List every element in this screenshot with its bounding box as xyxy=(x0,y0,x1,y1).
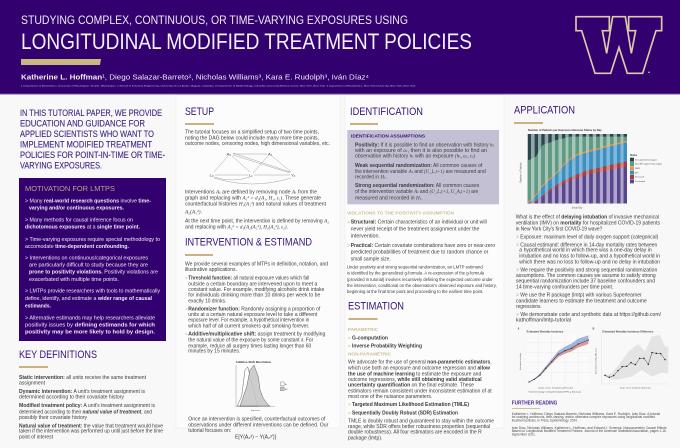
additive shift density chart: Additive Shift Illustration xyxy=(236,360,272,364)
stacked bar and flow chart: NIMV xyxy=(635,168,641,170)
affiliations: 1 Department of Biostatistics, University of Washington, Seattle, Washington. 2 School of Industrial Engineering, University of Los Andes, Bogotá, Colombia. 3 Department of Epidemiology, Columbia University Medical Center, New York, New York. 4 Department of Biostatistics, New York University, New York, New York. xyxy=(21,84,417,88)
motivation bullets xyxy=(25,198,160,335)
intervention types list: > xyxy=(185,275,188,280)
panel: key definitions xyxy=(19,349,163,440)
intervention types list: constant value. For example, modifying alcoholic drink intake xyxy=(188,287,324,293)
positivity violations xyxy=(347,210,495,262)
application question and bullets: > Causal estimand: difference in 14-day mortality rates between xyxy=(516,242,657,248)
icon: university W logo xyxy=(576,17,662,73)
intervention types list: example, reduce all surgery times lasting longer than 60 xyxy=(188,343,311,349)
positivity violations: intervention. xyxy=(351,233,380,239)
positivity violations: small sample size. xyxy=(351,256,391,262)
chart A: estimated mortality incidence: Treatment strategy: ● Delayed Intubation (MTP) ▲ Status quo xyxy=(528,391,582,394)
definitions list: possibly their covariate history xyxy=(19,415,87,421)
identification assumptions box: recorded in Hₜ. xyxy=(355,175,387,181)
stacked bar and flow chart: No supplemental oxygen xyxy=(635,158,657,161)
further reading: Based on Longitudinal Modified Treatment Policies. Journal of the American Statistical Association, pages 1-16, xyxy=(512,429,667,433)
non-parametric estimators: package (lmtp). xyxy=(348,435,382,441)
chart A: estimated mortality incidence: Days since hospital admission xyxy=(538,386,573,389)
chart B: estimated mortality incidence difference: Days since hospital admission xyxy=(620,386,651,389)
identification assumptions box: Weak sequential randomization: All common causes of xyxy=(355,163,483,169)
intervention types list: exactly 10 drinks. xyxy=(188,298,226,304)
chart B: estimated mortality incidence difference xyxy=(593,329,668,389)
intervention types list xyxy=(185,275,325,355)
parametric estimators: Inverse Probability Weighting xyxy=(352,343,422,349)
additive shift density chart: Exposure xyxy=(251,409,261,412)
non-parametric estimators: most one of the nuisance parameters. xyxy=(348,394,432,400)
panel: application xyxy=(512,104,668,437)
intervention types list: outside a certain boundary are intervened upon to meet a xyxy=(188,281,317,287)
application question and bullets: > We use the R package (lmtp) with various Superlearner xyxy=(516,293,642,299)
identification assumptions box: the intervention variable Aₜ and (U_L,t+1) are measured and xyxy=(355,168,486,175)
parametric estimators: > xyxy=(348,335,351,340)
intervention types list: exposure level. For example, a hypothetical intervention in xyxy=(188,318,309,324)
motivation bullets: exacerbated with multiple time points. xyxy=(29,277,119,283)
setup intervention text xyxy=(184,189,329,230)
intervention intro: We provide several examples of MTPs in definition, notation, and xyxy=(185,261,328,267)
DAG diagram: L₁ xyxy=(249,172,253,178)
positivity violations: > xyxy=(347,220,350,225)
DAG diagram: A₀ xyxy=(226,152,231,156)
intervention types list: which half of all current smokers quit smoking forever. xyxy=(188,324,309,330)
identification assumptions box xyxy=(347,130,499,204)
key definitions heading: KEY DEFINITIONS xyxy=(19,349,97,361)
gold title bar xyxy=(21,59,101,65)
application question and bullets: a hypothetical world in which there was a one-day delay in xyxy=(519,248,652,254)
identification assumptions box: with an exposure of aₜ, then it is also possible to find an xyxy=(355,148,487,154)
intervention types list: Randomizer function: Randomly assigning a proportion of xyxy=(188,306,321,312)
definitions list: determined according to their natural value of treatment, and xyxy=(19,409,152,415)
parametric estimators xyxy=(348,327,422,349)
intervention heading: INTERVENTION & ESTIMAND xyxy=(185,237,312,249)
chart A: estimated mortality incidence xyxy=(518,328,590,394)
application question and bullets: ventilation (IMV) on mortality for hospitalized COVID-19 patients xyxy=(516,220,660,226)
motivation bullets: dichotomous exposures at a single time point. xyxy=(25,225,141,231)
setup intervention text: counterfactual histories H₁(A₁ᵈ) and natural values of treatment xyxy=(185,201,327,208)
definitions list: taken if the intervention was performed up until just before the time xyxy=(19,429,163,435)
setup intervention text: A₂(A₁ᵈ). xyxy=(184,208,202,215)
positivity violations: never yield receipt of the treatment assignment under the xyxy=(351,226,479,232)
non-parametric estimators: Sequentially Doubly Robust (SDR) Estimation xyxy=(352,410,458,416)
intro statement: POLICIES FOR POINT-IN-TIME OR TIME- xyxy=(20,150,165,160)
non-parametric estimators: the use of machine learning to estimate the exposure and xyxy=(348,371,481,377)
estimand text xyxy=(188,417,329,434)
positivity violations: > xyxy=(347,243,350,248)
stacked bar and flow chart: IMV xyxy=(635,172,639,174)
intervention intro xyxy=(185,261,328,273)
application question and bullets: in New York City's first COVID-19 wave? xyxy=(516,226,602,232)
motivation bullets: positivity may be more likely to hold by design. xyxy=(25,329,156,335)
application question and bullets: intubation and no loss to follow-up, and a hypothetical world in xyxy=(519,253,660,259)
g-formula note xyxy=(347,265,497,294)
g-formula note: beginning at the final time point and proceeding to the earliest time point. xyxy=(347,289,483,294)
additive shift density chart: Aᵈ xyxy=(285,388,287,391)
estimation heading: ESTIMATION xyxy=(348,300,404,312)
parametric estimators: G-computation xyxy=(352,335,388,341)
additive shift density chart: A xyxy=(285,383,287,386)
stacked bar and flow chart: Deceased xyxy=(635,177,644,179)
further reading: FURTHER READING xyxy=(512,401,557,407)
setup intro text: noting the DAG below could include many more time points, xyxy=(185,135,319,141)
setup intro text: The tutorial focuses on a simplified setup of two time points, xyxy=(185,129,319,135)
DAG diagram: Y₂ xyxy=(291,172,296,178)
DAG diagram: L₀ xyxy=(210,172,214,178)
motivation bullets: > Many methods for causal inference focus on xyxy=(25,217,133,223)
setup intervention text: At the next time point, the intervention is defined by removing A₂ xyxy=(185,218,329,224)
application question and bullets xyxy=(516,215,662,324)
further reading: for studying continuous, time-varying, and/or otherwise complex exposures using longitudinal modified xyxy=(512,415,655,419)
intervention types list: Threshold function: all natural exposure values which fall xyxy=(188,275,309,281)
further reading: Iván Díaz, Nicholas Williams, Katherine L. Hoffman, and Edward J. Schenck. Nonparametric Causal Effects xyxy=(512,426,667,430)
g-formula note: (provided in tutorial) involves recursively defining the expected outcome under xyxy=(347,277,493,282)
application question and bullets: 14 time-varying confounders per time point. xyxy=(516,284,613,290)
parametric estimators: > xyxy=(348,343,351,348)
application question and bullets: > Exposure: maximum level of daily oxygen support (categorical) xyxy=(516,235,659,241)
further reading: treatment policies. In Press, Epidemiology. 2024. xyxy=(512,418,578,422)
further reading xyxy=(512,401,667,436)
application question and bullets: candidate learners to estimate the treatment and outcome xyxy=(516,298,647,304)
chart A: estimated mortality incidence: Estimated Mortality Incidence xyxy=(527,330,564,333)
motivation bullets: varying and/or continuous exposures. xyxy=(29,206,125,212)
non-parametric estimators: estimators remain consistent under inconsistent estimation of at xyxy=(348,388,492,394)
motivation bullets: > Time-varying exposures require special methodology to xyxy=(25,237,160,243)
non-parametric estimators: TMLE is doubly robust and guaranteed to stay within the outcome xyxy=(348,418,494,424)
setup intro text xyxy=(185,129,330,147)
non-parametric estimators: NON-PARAMETRIC xyxy=(348,351,392,356)
motivation bullets: > LMTPs provide researchers with tools to mathematically xyxy=(25,289,160,295)
panel: third column background xyxy=(345,95,504,428)
identification assumptions box: observation with history hₜ with an exposure (hₜ, aₜ, εₜ) xyxy=(355,153,475,160)
panel: estimation xyxy=(348,300,494,441)
intro statement: APPLIED SCIENTISTS WHO WANT TO xyxy=(20,129,154,139)
estimand formula: E[Y(A₂ᵈ) − Y(A₂ᵈ′)] xyxy=(235,434,277,440)
application question and bullets: What is the effect of delaying intubation of invasive mechanical xyxy=(516,215,659,221)
non-parametric estimators xyxy=(348,351,494,441)
panel: setup xyxy=(184,106,330,230)
estimand text: observations under different interventions can be defined. Our xyxy=(188,422,329,428)
non-parametric estimators: > xyxy=(348,410,351,415)
definitions list: Natural value of treatment: the value that treatment would have xyxy=(19,423,163,429)
intro statement: IMPLEMENT MODIFIED TREATMENT xyxy=(20,140,152,150)
g-formula note: the intervention, conditional on the observation's observed exposure and history, xyxy=(347,283,497,288)
definitions list: Dynamic intervention: A unit's treatment assignment is xyxy=(19,389,145,395)
chart B: estimated mortality incidence difference: B xyxy=(593,329,595,331)
stacked bar and flow chart: Status xyxy=(630,154,638,157)
stacked bar and flow chart: Non-IMV supplemental oxygen xyxy=(635,163,662,166)
motivation bullets: prone to positivity violations. Positivity violations are xyxy=(29,270,158,276)
chart A: estimated mortality incidence: Estimated mortality xyxy=(519,353,522,370)
intro statement xyxy=(20,108,165,170)
motivation bullets: positivity issues by defining estimands for which xyxy=(25,322,155,328)
intervention intro: illustrative applications. xyxy=(185,267,237,273)
setup intervention text: Interventions Aₜ are defined by removing node Aₜ from the xyxy=(185,189,317,195)
g-formula note: is identified by the generalized g-formula. A re-expression of the g-formula xyxy=(347,270,485,275)
setup intro text: outcome nodes, censoring nodes, high dimensional variables, etc. xyxy=(185,141,330,147)
intervention types list: minutes by 15 minutes. xyxy=(188,349,240,355)
stacked bar and flow chart: Study Day xyxy=(572,206,583,209)
identification assumptions box: Strong sequential randomization: All common causes xyxy=(355,183,480,189)
positivity violations: Structural: Certain characteristics of an individual or unit will xyxy=(351,220,487,226)
intervention types list: > xyxy=(185,306,188,311)
further reading: Katherine L. Hoffman, Diego Salazar-Barreto, Nicholas Williams, Kara E. Rudolph, Iván Díaz. A tutorial xyxy=(512,412,660,416)
application question and bullets: which there was no loss to follow-up and no delay in intubation xyxy=(519,259,660,265)
identification assumptions box: Positivity: If it is possible to find an observation with history hₜ xyxy=(355,142,494,148)
non-parametric estimators: double robustness). All four estimators are encoded in the R xyxy=(348,430,482,436)
parametric estimators: PARAMETRIC xyxy=(348,327,379,332)
identification assumptions box: measured and recorded in Hₜ. xyxy=(355,196,423,202)
chart B: estimated mortality incidence difference: Estimated Mortality Incidence Difference xyxy=(602,330,654,333)
motivation bullets: accomodate time-dependent confounding. xyxy=(25,244,130,250)
non-parametric estimators: > xyxy=(348,402,351,407)
stacked bar and flow chart: Discharged xyxy=(635,180,645,183)
definitions list: point of interest xyxy=(19,434,54,440)
definitions list: Static intervention: all units receive the same treatment xyxy=(19,375,147,381)
intervention types list: for individuals drinking more than 10 drinks per week to be xyxy=(188,293,320,299)
title line 2: LONGITUDINAL MODIFIED TREATMENT POLICIES xyxy=(21,29,472,54)
intervention types list: units at a certain natural exposure level to take a different xyxy=(188,312,318,318)
DAG diagram xyxy=(210,152,296,184)
intervention types list: the natural value of the exposure by some constant δ. For xyxy=(188,338,314,344)
identification assumptions box: of the intervention variable Aₜ and (U_L,t+1, U_A,t+1) are xyxy=(355,188,478,195)
non-parametric estimators: outcome regressions, while still obtaining valid statistical xyxy=(348,377,482,383)
intro statement: VARYING EXPOSURES. xyxy=(20,160,102,170)
header banner xyxy=(0,0,680,94)
further reading: September 2021. xyxy=(512,432,536,436)
definitions list: Modified treatment policy: A unit's treatment assignment is xyxy=(19,403,155,409)
stacked bar and flow chart: Number of Patients per Exposure-Outcome Status by Day xyxy=(528,129,602,132)
panel: identification xyxy=(347,106,499,294)
application question and bullets: sequential randomization include 37 baseline confounders and xyxy=(516,279,655,285)
application heading: APPLICATION xyxy=(514,104,575,116)
definitions list: assignment xyxy=(19,381,46,387)
intervention types list: > xyxy=(185,332,188,337)
authors: Katherine L. Hoffman ¹, Diego Salazar-Barreto², Nicholas Williams³, Kara E. Rudolph³, Iván Díaz⁴ xyxy=(21,74,369,82)
intro statement: EDUCATION AND GUIDANCE FOR xyxy=(20,118,145,128)
title line 1: STUDYING COMPLEX, CONTINUOUS, OR TIME-VARYING EXPOSURES USING xyxy=(21,13,408,27)
motivation bullets: > Many real-world research questions involve time- xyxy=(25,198,151,204)
chart B: estimated mortality incidence difference: Estimated mortality difference xyxy=(595,347,598,374)
motivation heading: MOTIVATION FOR LMTPS xyxy=(25,186,115,193)
non-parametric estimators: We advocate for the use of general non-parametric estimators, xyxy=(348,360,492,366)
panel: intervention and estimand xyxy=(185,237,329,440)
panel: second column background xyxy=(176,95,340,428)
non-parametric estimators: uncertainty quantification on the final estimate. These xyxy=(348,383,474,389)
definitions list: determined according to their covariate history xyxy=(19,395,124,401)
motivation bullets: estimands. xyxy=(25,304,52,310)
definitions list xyxy=(19,375,163,440)
identification heading: IDENTIFICATION xyxy=(350,106,423,118)
non-parametric estimators: which use both an exposure and outcome regression and allow xyxy=(348,365,490,371)
application question and bullets: > We demonstrate code and synthetic data at https://github.com/ xyxy=(516,312,662,318)
additive shift density chart xyxy=(236,360,287,412)
identification assumptions box: IDENTIFICATION ASSUMPTIONS xyxy=(351,134,425,139)
application question and bullets: > We require the positivity and strong sequential randomization xyxy=(516,267,657,273)
application question and bullets: regressions. xyxy=(516,304,542,310)
g-formula note: Under positivity and strong sequential randomization, an LMTP estimand xyxy=(347,265,483,270)
stacked bar and flow chart xyxy=(519,129,662,209)
chart A: estimated mortality incidence: A xyxy=(518,328,520,331)
estimand text: Once an intervention is specified, counterfactual outcomes of xyxy=(188,417,326,423)
DAG diagram: A₁ xyxy=(267,152,273,156)
intervention types list: Additive/multiplicative shift: assign treatment by modifying xyxy=(188,332,325,338)
intro statement: IN THIS TUTORIAL PAPER, WE PROVIDE xyxy=(20,108,162,118)
panel: motivation for LMTPs xyxy=(19,178,166,341)
application question and bullets: assumptions. The common causes we assume to satisfy strong xyxy=(516,273,656,279)
motivation bullets: > Interventions on continuous/categorical exposures xyxy=(25,256,148,262)
setup heading: SETUP xyxy=(185,106,214,118)
motivation bullets: define, identify, and estimate a wider range of causal xyxy=(25,296,153,302)
stacked bar and flow chart: Number of Patients xyxy=(519,162,522,182)
non-parametric estimators: range, while SDR offers better robustness properties (sequential xyxy=(348,424,490,430)
non-parametric estimators: Targeted Maximum Likelihood Estimation (TMLE) xyxy=(352,402,469,408)
estimand text: tutorial focuses on: xyxy=(188,428,231,434)
positivity violations: predicted probabilities of treatment due to random chance or xyxy=(351,249,489,255)
setup intervention text: and replacing with A₂ᵈ = d₂(A₂(A₁ᵈ), H₂(A₁ᵈ), ε₂). xyxy=(185,223,288,230)
motivation bullets: are particularly difficult to study because they are xyxy=(29,263,148,269)
motivation bullets: > Alternative estimands may help researchers alleviate xyxy=(25,315,155,321)
positivity violations: VIOLATIONS TO THE POSITIVITY ASSUMPTION xyxy=(347,210,454,215)
setup intervention text: graph and replacing with A₁ᵈ = d₁(A₁, H₁, ε₁). These generate xyxy=(185,194,321,201)
positivity violations: Practical: Certain covariate combinations have zero or near-zero xyxy=(351,243,495,249)
application question and bullets: kathoffman/lmtp-tutorial xyxy=(516,318,571,324)
